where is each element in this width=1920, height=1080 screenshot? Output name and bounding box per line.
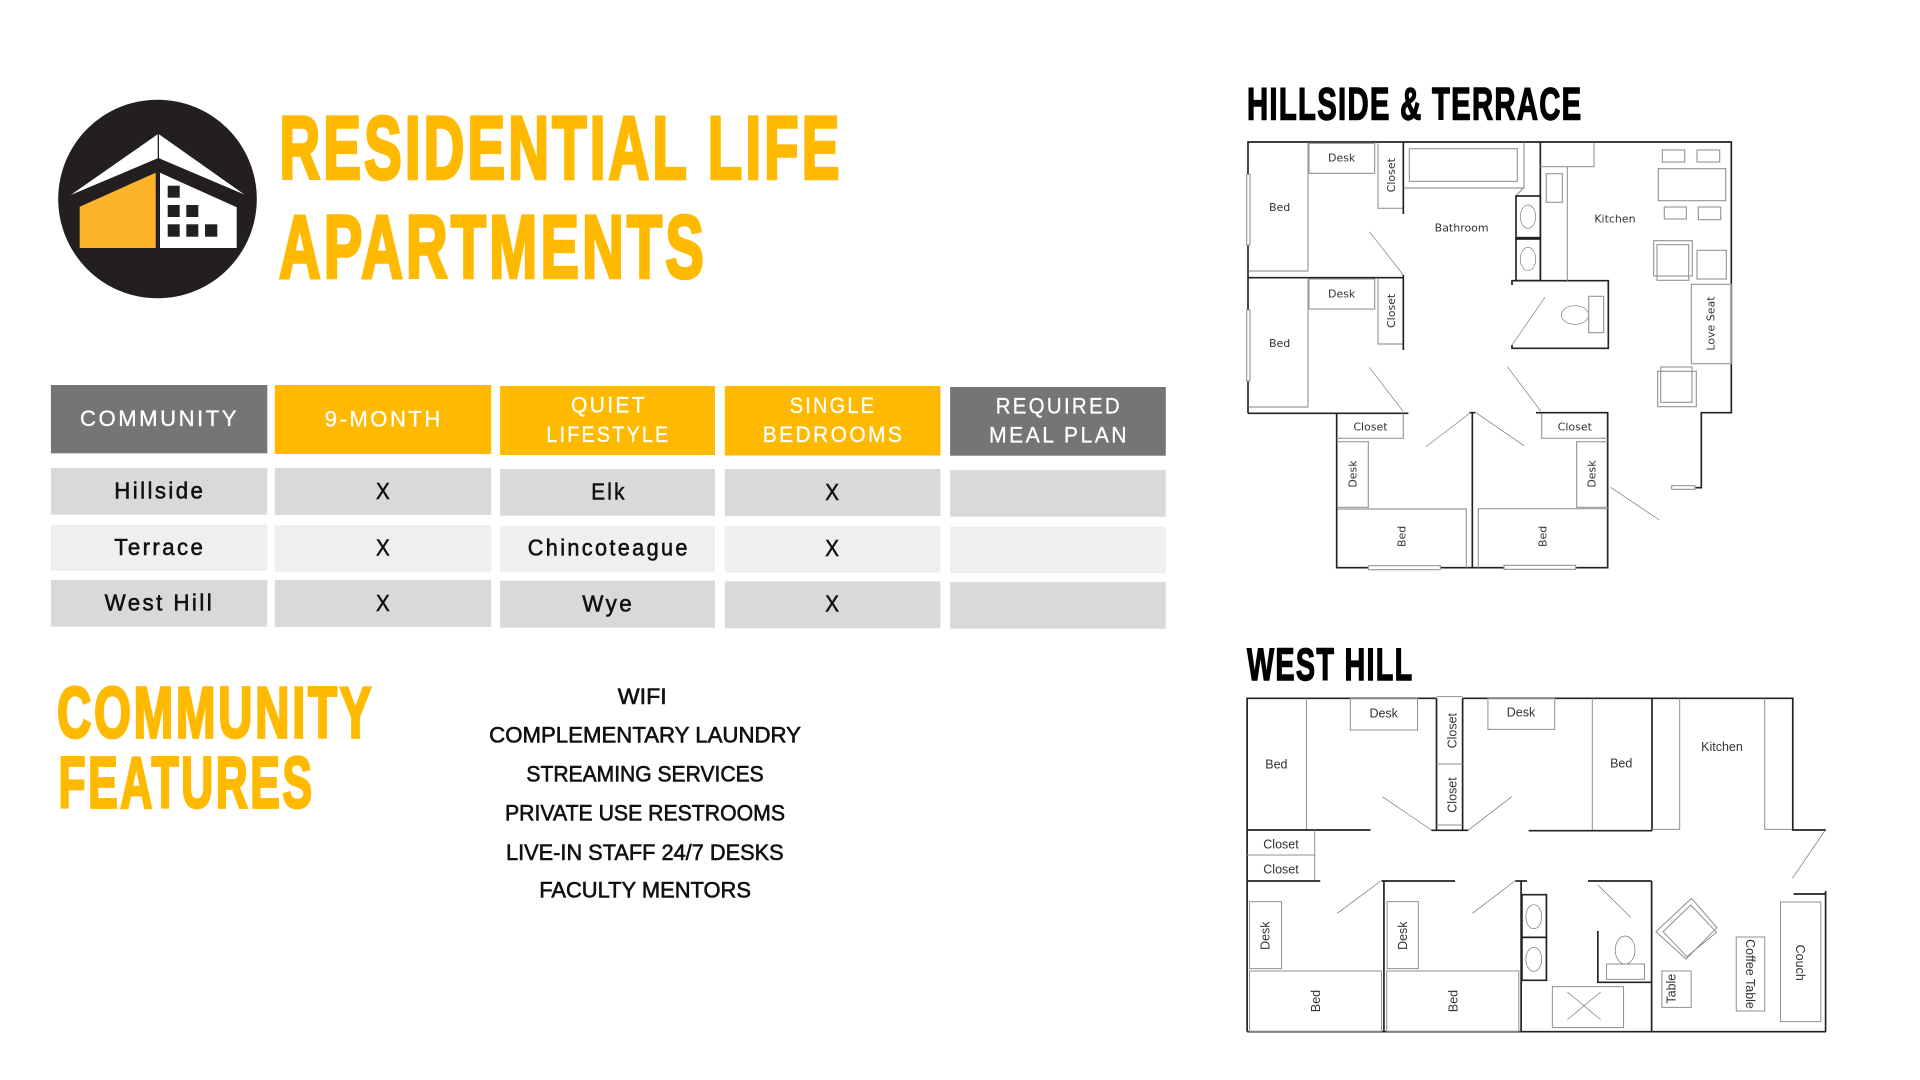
- floor plan: West Hill: Desk: [1396, 921, 1410, 950]
- floor plan: West Hill: Desk: [1507, 706, 1536, 720]
- table row: Hillside: X: [376, 478, 392, 504]
- floor plan: West Hill: Closet: [1263, 837, 1299, 851]
- heading: community features: [57, 674, 374, 824]
- floor plan: Hillside and Terrace: Closet: [1558, 420, 1593, 433]
- table row: West Hill: West Hill: [105, 590, 214, 616]
- features list: [489, 684, 801, 903]
- title: APARTMENTS: [279, 196, 707, 296]
- heading: West Hill: WEST HILL: [1247, 639, 1414, 690]
- table row: West Hill: [51, 580, 1166, 629]
- floor plan: Hillside and Terrace: [1247, 142, 1731, 570]
- table row: Terrace: X: [376, 534, 392, 560]
- floor plan: Hillside and Terrace: Kitchen: [1594, 212, 1636, 225]
- table header row: SINGLE: [790, 393, 876, 418]
- features list: STREAMING SERVICES: [526, 762, 764, 787]
- floor plan: West Hill: Table: [1665, 974, 1679, 1004]
- floor plan: West Hill: Desk: [1258, 921, 1272, 950]
- title: [279, 98, 842, 296]
- floor plan: Hillside and Terrace: Desk: [1585, 460, 1598, 488]
- floor plan: Hillside and Terrace: Bed: [1269, 201, 1290, 214]
- floor plan: Hillside and Terrace: Love Seat: [1705, 296, 1718, 351]
- table row: Terrace: X: [825, 535, 841, 561]
- table row: West Hill: X: [376, 590, 392, 616]
- floor plan: Hillside and Terrace: Desk: [1328, 152, 1356, 165]
- floor plan: West Hill: Bed: [1446, 990, 1460, 1012]
- table header row: REQUIRED: [996, 393, 1122, 418]
- table: community comparison: [51, 385, 1166, 629]
- table header row: QUIET: [571, 393, 647, 418]
- floor plan: Hillside and Terrace: Bed: [1269, 337, 1290, 350]
- floor plan: West Hill: [1247, 697, 1826, 1032]
- heading: Hillside and Terrace: HILLSIDE & TERRACE: [1247, 78, 1582, 130]
- table header row: LIFESTYLE: [546, 422, 670, 447]
- table row: Hillside: Hillside: [114, 477, 205, 503]
- floor plan: Hillside and Terrace: Desk: [1347, 460, 1360, 488]
- table row: West Hill: Wye: [582, 590, 634, 616]
- table header row: MEAL PLAN: [989, 423, 1129, 448]
- table header row: [51, 385, 1166, 456]
- features list: WIFI: [618, 684, 667, 709]
- floor plan: Hillside and Terrace: Closet: [1385, 293, 1398, 328]
- table row: Hillside: [51, 468, 1166, 517]
- table row: West Hill: X: [825, 590, 841, 616]
- icon: residential life logo: [58, 100, 257, 298]
- table row: Terrace: Terrace: [114, 534, 205, 560]
- floor plan: Hillside and Terrace: Desk: [1328, 287, 1356, 300]
- table row: Hillside: Elk: [591, 479, 627, 505]
- table header row: COMMUNITY: [80, 406, 239, 431]
- floor plan: West Hill: Closet: [1263, 862, 1299, 876]
- heading: community features: FEATURES: [58, 744, 314, 824]
- floor plan: West Hill: Bed: [1265, 757, 1288, 771]
- floor plan: West Hill: Bed: [1309, 990, 1323, 1012]
- features list: COMPLEMENTARY LAUNDRY: [489, 723, 801, 748]
- table row: Hillside: X: [825, 479, 841, 505]
- floor plan: Hillside and Terrace: Closet: [1353, 421, 1388, 434]
- floor plan: West Hill: Kitchen: [1701, 740, 1743, 754]
- heading: community features: COMMUNITY: [57, 674, 374, 754]
- table header row: 9-MONTH: [325, 407, 443, 432]
- floor plan: West Hill: Coffee Table: [1743, 939, 1757, 1009]
- features list: LIVE-IN STAFF 24/7 DESKS: [506, 840, 784, 865]
- title: RESIDENTIAL LIFE: [280, 98, 842, 198]
- table row: Terrace: Chincoteague: [528, 534, 690, 560]
- floor plan: West Hill: Couch: [1793, 945, 1807, 981]
- features list: FACULTY MENTORS: [539, 878, 751, 903]
- floor plan: Hillside and Terrace: Bed: [1537, 526, 1550, 547]
- floor plan: West Hill: Desk: [1369, 706, 1399, 720]
- floor plan: West Hill: Bed: [1610, 757, 1632, 771]
- floor plan: Hillside and Terrace: Bed: [1396, 526, 1409, 547]
- table header row: BEDROOMS: [763, 422, 904, 447]
- floor plan: Hillside and Terrace: Bathroom: [1435, 221, 1489, 234]
- features list: PRIVATE USE RESTROOMS: [505, 801, 785, 826]
- floor plan: West Hill: Closet: [1446, 712, 1460, 748]
- table row: Terrace: [51, 525, 1166, 573]
- floor plan: Hillside and Terrace: Closet: [1385, 157, 1398, 192]
- floor plan: West Hill: Closet: [1446, 777, 1460, 813]
